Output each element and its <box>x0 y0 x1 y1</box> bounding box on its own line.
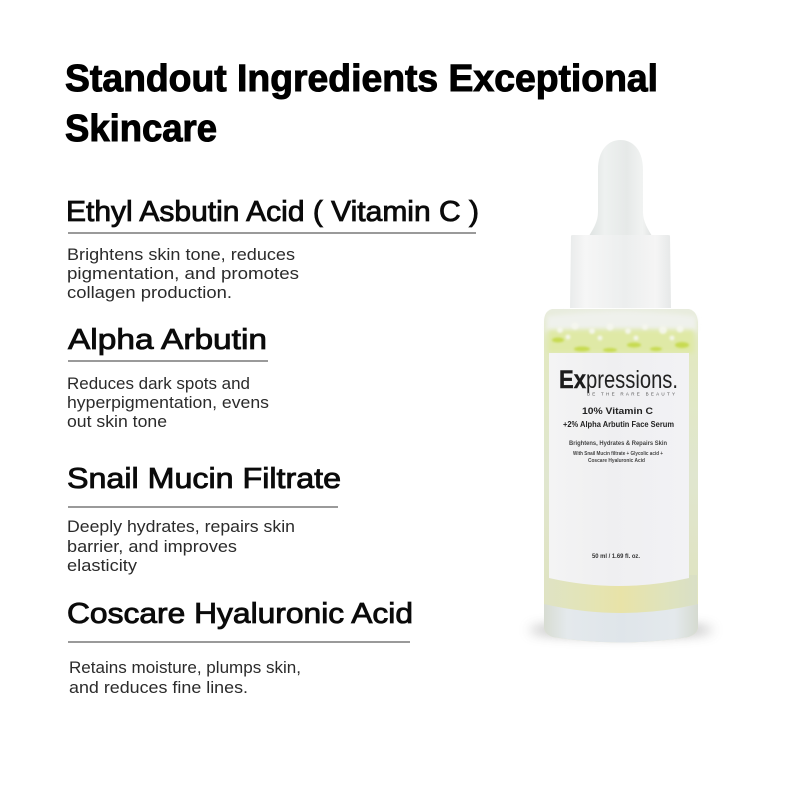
description: Alpha Arbutin: Reduces dark spots and <box>67 375 250 393</box>
bubbles <box>546 311 697 353</box>
title: Standout Ingredients Exceptional <box>65 58 658 100</box>
label claims <box>569 440 667 464</box>
description: Alpha Arbutin <box>67 375 269 431</box>
description: Snail Mucin Filtrate: Deeply hydrates, repairs skin <box>67 518 295 536</box>
description: Ethyl Asbutin Acid: Brightens skin tone, reduces <box>67 246 295 264</box>
brand name <box>559 366 678 396</box>
product name: 10% Vitamin C <box>582 406 653 417</box>
bottle shadow <box>529 624 713 636</box>
liquid band <box>545 575 697 613</box>
section: Coscare Hyaluronic Acid <box>67 598 413 697</box>
volume: 50 ml / 1.69 fl. oz. <box>592 553 640 560</box>
description: Ethyl Asbutin Acid: pigmentation, and promotes <box>67 265 299 283</box>
heading: Ethyl Asbutin Acid: Ethyl Asbutin Acid ( Vitamin C ) <box>66 196 479 228</box>
brand name: BE THE RARE BEAUTY <box>587 392 675 396</box>
bottle base <box>544 604 698 642</box>
title <box>65 58 658 150</box>
description: Coscare Hyaluronic Acid: and reduces fine lines. <box>69 679 248 697</box>
section: Snail Mucin Filtrate <box>67 463 341 575</box>
description: Alpha Arbutin: hyperpigmentation, evens <box>67 394 269 412</box>
section: Ethyl Asbutin Acid <box>66 196 479 302</box>
dropper collar <box>570 235 671 308</box>
product name <box>563 406 674 429</box>
brand name: pressions. <box>586 366 678 394</box>
heading: Coscare Hyaluronic Acid: Coscare Hyaluronic Acid <box>67 598 413 630</box>
description: Alpha Arbutin: out skin tone <box>67 413 167 431</box>
description: Snail Mucin Filtrate: elasticity <box>67 557 138 575</box>
section: Alpha Arbutin <box>67 324 269 431</box>
title: Skincare <box>65 108 217 150</box>
product name: +2% Alpha Arbutin Face Serum <box>563 420 674 429</box>
heading: Snail Mucin Filtrate: Snail Mucin Filtrate <box>67 463 341 495</box>
brand name: Ex <box>559 366 586 394</box>
label claims: Coscare Hyaluronic Acid <box>588 458 645 464</box>
description: Ethyl Asbutin Acid <box>67 246 299 302</box>
label claims: Brightens, Hydrates & Repairs Skin <box>569 440 667 447</box>
description: Coscare Hyaluronic Acid: Retains moisture, plumps skin, <box>69 659 301 677</box>
description: Coscare Hyaluronic Acid <box>69 659 301 697</box>
description: Ethyl Asbutin Acid: collagen production. <box>67 284 232 302</box>
heading: Alpha Arbutin: Alpha Arbutin <box>68 324 267 356</box>
dropper bulb <box>589 140 652 236</box>
description: Snail Mucin Filtrate <box>67 518 295 575</box>
glass bottle <box>544 309 698 642</box>
description: Snail Mucin Filtrate: barrier, and improves <box>67 538 237 556</box>
label claims: With Snail Mucin filtrate + Glycolic acid + <box>573 451 663 457</box>
product: serum bottle <box>529 140 713 642</box>
product label <box>549 353 689 586</box>
